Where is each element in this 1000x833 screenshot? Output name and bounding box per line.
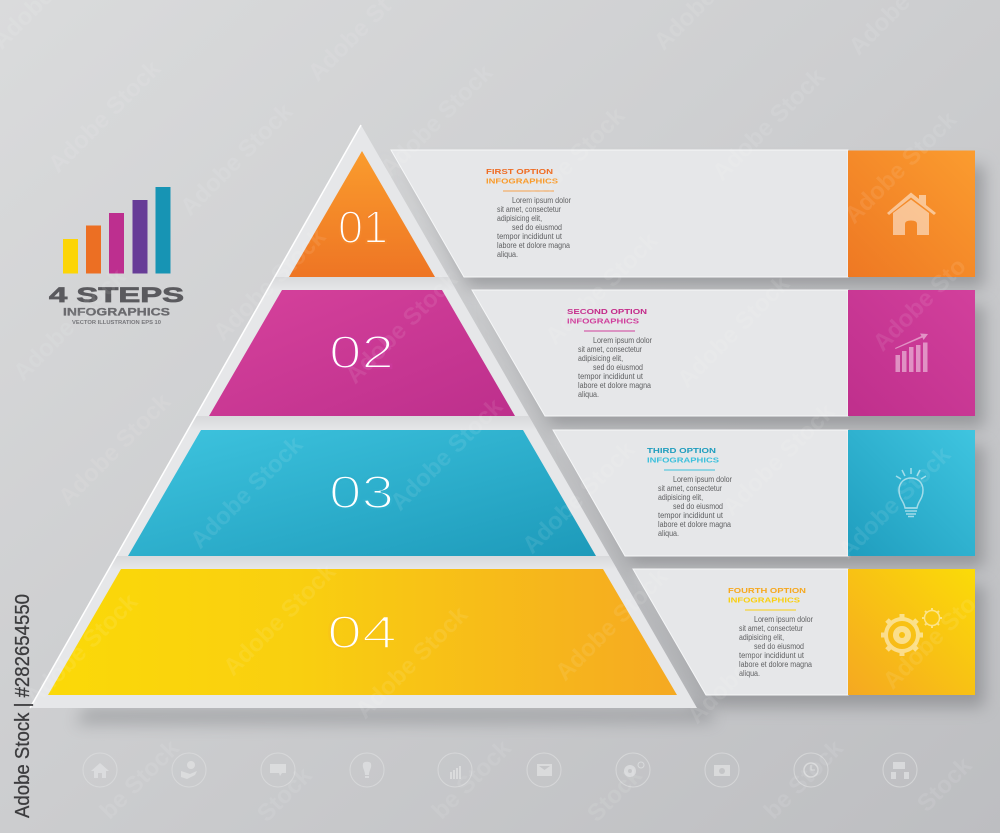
watermark pattern: Adobe Stock [517,436,641,559]
text block: fourth option: labore et dolore magna [739,660,812,669]
icon: light bulb [896,468,926,516]
icon: gears [881,608,942,656]
text block: second option: INFOGRAPHICS [567,318,639,326]
text block: third option: adipisicing elit, [658,493,703,502]
watermark pattern: Adobe Stock [208,223,332,346]
bottom icon row [83,753,917,787]
panel: second option [472,290,984,428]
pyramid base [30,124,697,708]
icon: growth chart [895,334,928,372]
watermark pattern: Stock [582,762,648,827]
watermark pattern: be Stock [759,734,849,825]
watermark pattern: Adobe Stock [833,441,957,564]
watermark pattern: Stock [252,762,318,827]
text block: fourth option [728,588,813,678]
watermark pattern: Adobe Stock [682,606,806,729]
colour block: yellow [848,569,975,695]
text block: first option: tempor incididunt ut [497,232,563,241]
number 02: 02 [329,326,394,378]
text block: second option: sit amet, consectetur [578,345,642,354]
text block: first option: Lorem ipsum dolor [512,196,571,205]
text block: first option: sed do eiusmod [512,223,562,232]
text block: fourth option: Lorem ipsum dolor [754,615,813,624]
text block: fourth option: aliqua. [739,669,760,678]
text block: first option: FIRST OPTION [486,169,553,176]
number 01: 01 [338,201,388,253]
watermark pattern: Adobe Stock [218,558,342,681]
text block: second option: labore et dolore magna [578,381,651,390]
logo: 4 steps infographics: 4 STEPS [49,284,184,307]
watermark pattern: be Stock [95,734,185,825]
text block: second option: aliqua. [578,390,599,399]
pyramid level 3 [128,430,596,556]
icon: house [887,192,936,235]
watermark pattern: Adobe Stock [53,388,177,511]
colour block: orange [848,150,975,277]
watermark pattern: Adobe Stock [43,55,167,178]
stock id label: Adobe Stock | #282654550 [12,594,34,818]
text block: first option: aliqua. [497,250,518,259]
watermark pattern: be Stock [427,734,517,825]
pyramid level 4 [48,569,677,695]
watermark pattern: Adobe Stock [340,266,464,389]
number 03: 03 [329,466,394,518]
watermark pattern: Adobe Stock [385,393,509,516]
watermark pattern: Adobe Stock [175,98,299,221]
panel: third option [553,430,984,568]
text block: fourth option: sit amet, consectetur [739,624,803,633]
pyramid level 2 [209,290,515,416]
text block: third option: THIRD OPTION [647,448,716,455]
text block: second option [567,309,652,399]
text block: third option: aliqua. [658,529,679,538]
colour block: cyan [848,430,975,556]
watermark pattern: Adobe Stock [540,227,664,350]
watermark pattern: Adobe Stock [507,102,631,225]
text block: third option: labore et dolore magna [658,520,731,529]
text block: first option: labore et dolore magna [497,241,570,250]
text block: first option: sit amet, consectetur [497,205,561,214]
text block: second option: adipisicing elit, [578,354,623,363]
watermark pattern: Adobe Stock [672,270,796,393]
watermark pattern: Adobe Stock [375,59,499,182]
text block: fourth option: adipisicing elit, [739,633,784,642]
number 04: 04 [327,606,397,658]
watermark pattern: Adobe Stock [185,431,309,554]
colour block: magenta [848,290,975,416]
pyramid level 1 [289,151,435,277]
text block: second option: sed do eiusmod [593,363,643,372]
watermark pattern: Adobe Stock [8,263,132,386]
text block: first option: adipisicing elit, [497,214,542,223]
logo: 4 steps infographics: VECTOR ILLUSTRATION EPS 10 [72,320,161,326]
logo: 4 steps infographics: INFOGRAPHICS [63,306,170,318]
text block: first option: INFOGRAPHICS [486,178,558,186]
pyramid shadow [75,140,716,724]
text block: third option: tempor incididunt ut [658,511,724,520]
text block: fourth option: INFOGRAPHICS [728,598,800,604]
watermark pattern: Adobe Stock [350,601,474,724]
text block: fourth option: tempor incididunt ut [739,651,805,660]
panel: first option [391,150,984,288]
text block: second option: SECOND OPTION [567,309,647,316]
text block: fourth option: sed do eiusmod [754,642,804,651]
watermark pattern: Adobe Sto [868,253,972,357]
text block: fourth option: FOURTH OPTION [728,588,806,595]
text block: third option: INFOGRAPHICS [647,458,719,464]
watermark pattern: Stock [912,752,978,817]
watermark pattern: Adobe Stock [550,563,674,686]
watermark pattern: Adobe Stock [839,106,963,229]
text block: third option: sed do eiusmod [673,502,723,511]
text block: second option: tempor incididunt ut [578,372,644,381]
watermark pattern: Adobe Sto [878,591,982,695]
text block: second option: Lorem ipsum dolor [593,336,652,345]
text block: first option [486,169,571,259]
watermark pattern: Adobe Stock [707,63,831,186]
watermark pattern: Adobe Stock [717,398,841,521]
panel: fourth option [633,569,984,707]
text block: third option: Lorem ipsum dolor [673,475,732,484]
text block: third option [647,448,732,538]
logo: 4 steps infographics [49,187,184,326]
text block: third option: sit amet, consectetur [658,484,722,493]
watermark pattern: Adobe Stock [20,588,144,711]
